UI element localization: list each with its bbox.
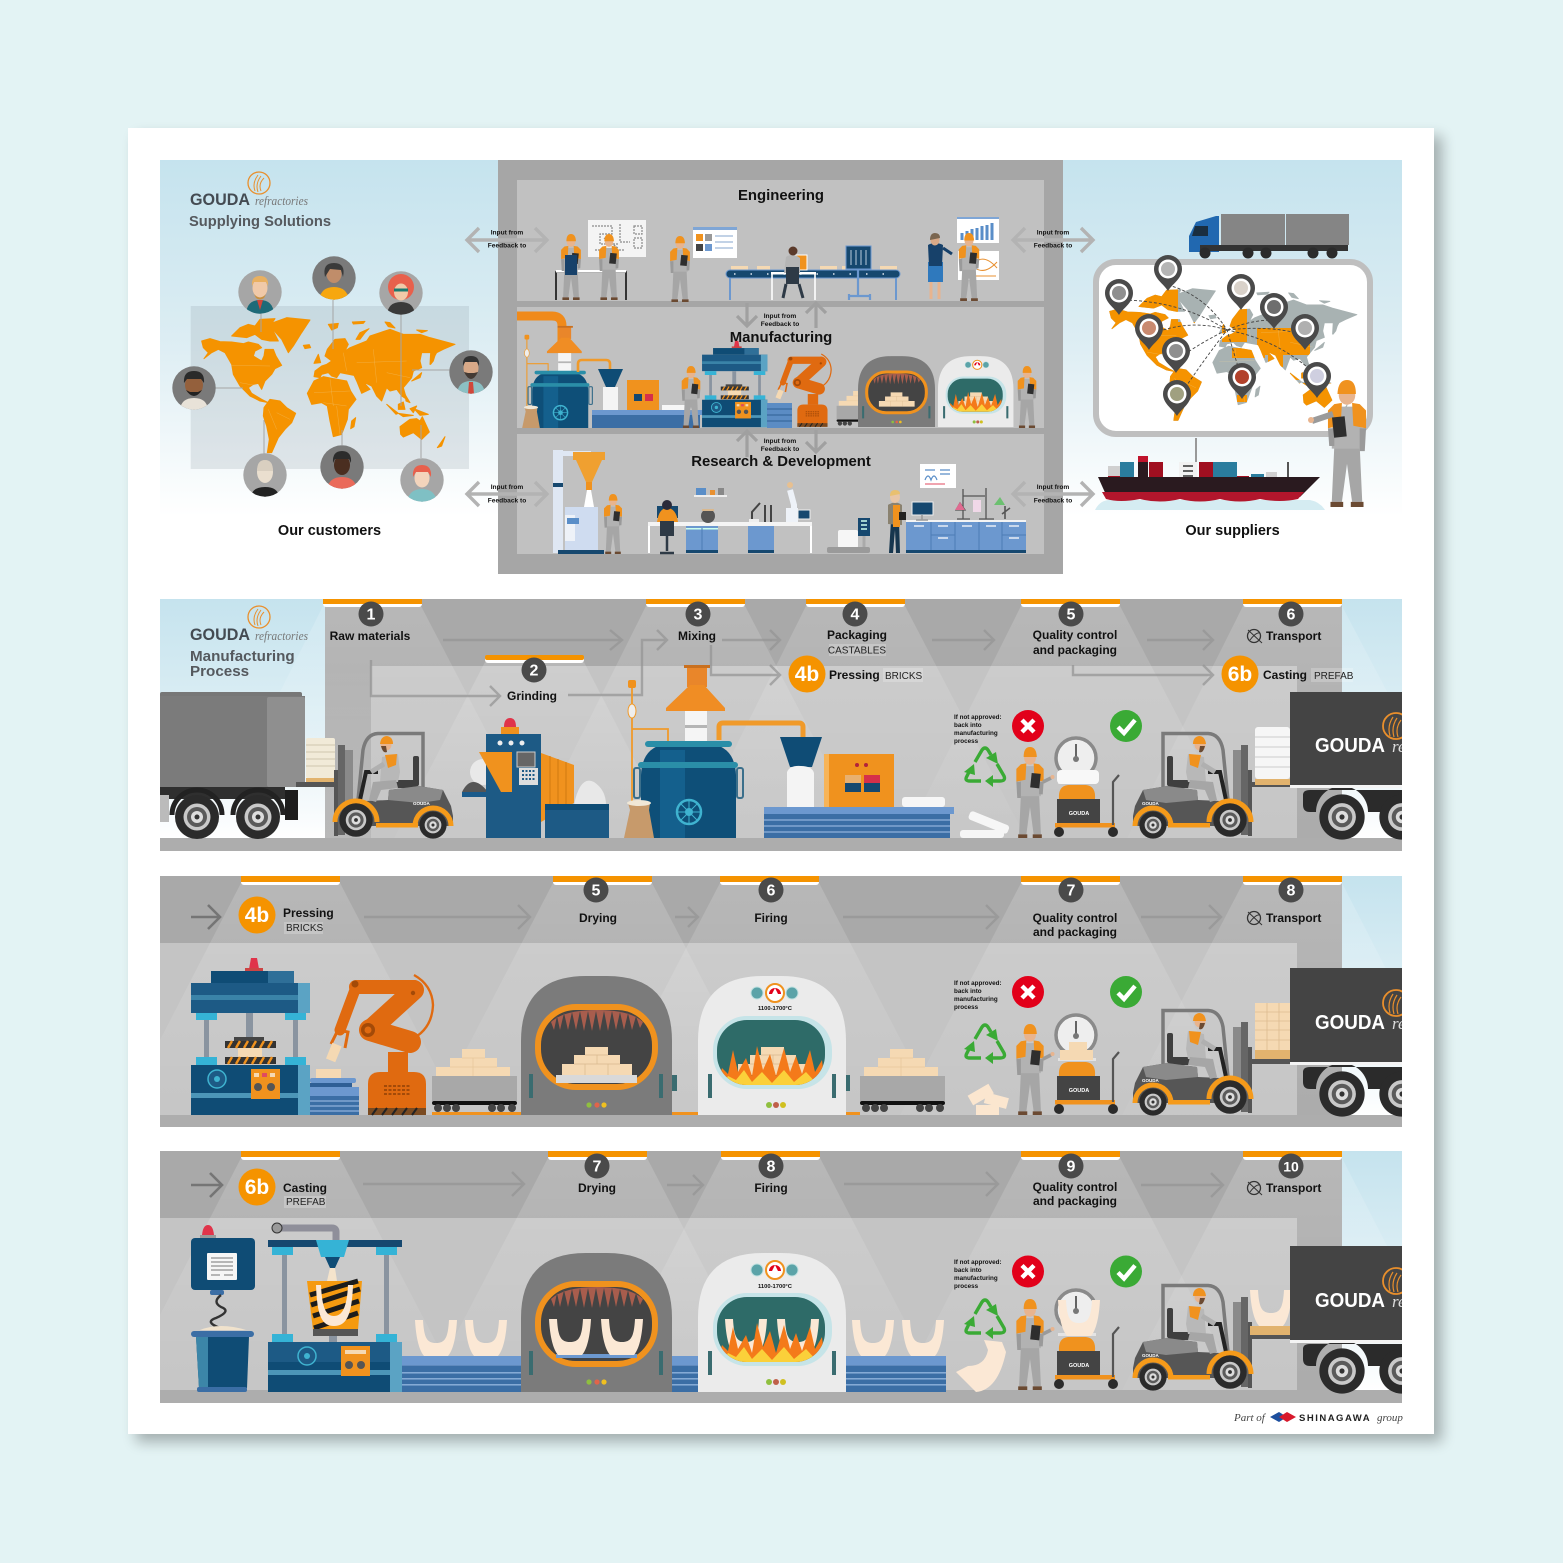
lamps (241, 1151, 1342, 1160)
conveyor with prefab shapes (402, 1320, 521, 1392)
rejected bricks (968, 1084, 1009, 1115)
reactor pipe (578, 360, 610, 372)
lab bench (906, 502, 1026, 553)
forklift label: GOUDA (1142, 1353, 1160, 1358)
logo: Gouda refractories: refractories (255, 193, 308, 208)
arrows: suppliers link, top: Feedback to (1034, 242, 1072, 250)
worker (1018, 366, 1036, 428)
scientist (888, 490, 906, 553)
flow arrows (371, 630, 1213, 706)
step 7: quality control: and packaging (1033, 925, 1117, 939)
step 7: drying (578, 1154, 616, 1195)
step 6b: casting prefab (238, 1168, 327, 1208)
truck delivering raw materials (160, 692, 305, 839)
dryer (521, 1253, 672, 1392)
QC station (964, 1290, 1119, 1390)
connector between kilns (672, 1075, 677, 1091)
table with two engineers (556, 234, 626, 300)
step 5: quality control: 5 (1067, 607, 1076, 624)
step 8: firing: Firing (754, 1181, 788, 1195)
orange floor lines (432, 1112, 860, 1115)
forklift label: GOUDA (1142, 1078, 1160, 1083)
press (702, 341, 768, 427)
robot (776, 354, 831, 427)
lamps (323, 599, 1342, 663)
prefab on pallet (1250, 1290, 1292, 1335)
engineer pointing at map (1308, 380, 1366, 507)
step 7: quality control: Quality control (1033, 911, 1117, 925)
step 6b: casting prefab: PREFAB (1314, 671, 1354, 682)
footer: part of Shinagawa group: Part of (1233, 1412, 1267, 1424)
avatar 6 (243, 453, 287, 497)
step 4: packaging castables: CASTABLES (828, 646, 886, 656)
step 8: firing: 8 (767, 1159, 776, 1176)
logo: Gouda refractories (190, 606, 308, 644)
brick stack (767, 403, 792, 428)
connector after furnace (846, 1075, 850, 1091)
logo: Gouda refractories (190, 172, 308, 209)
truck leaving: ref (1392, 1014, 1413, 1033)
arrows: suppliers link, top (1013, 228, 1093, 252)
truck leaving (1290, 1246, 1425, 1394)
step 3: mixing: 3 (694, 607, 703, 624)
step 8: firing (754, 1154, 788, 1195)
logo: Gouda refractories: refractories (255, 628, 308, 643)
step 8: transport (1248, 878, 1321, 925)
sacks on pallet (306, 738, 335, 784)
map panel: customers (191, 306, 469, 469)
step 10: transport (1248, 1154, 1321, 1195)
engineer with chart panels (957, 217, 999, 301)
panel: process row 2 (160, 876, 1425, 1127)
avatar 5 (172, 366, 216, 410)
bag on scale (1057, 770, 1099, 817)
step 6: firing (754, 878, 788, 925)
forklift label: GOUDA (413, 801, 430, 806)
step 6b: casting prefab: Casting (283, 1181, 327, 1195)
panel: suppliers map (1096, 255, 1370, 434)
arrows: customers link, bottom (467, 482, 547, 506)
arrows: suppliers link, bottom: Feedback to (1034, 498, 1072, 504)
arrows: customers link, top (467, 228, 547, 252)
furnace (698, 976, 846, 1115)
forklift (1133, 1286, 1290, 1391)
wagon with bricks (432, 1049, 517, 1112)
heading: our customers: Our customers (278, 523, 381, 539)
footer: part of Shinagawa group: group (1377, 1412, 1403, 1424)
QC note: manufacturing (954, 730, 998, 737)
panel: process row 3 (160, 1151, 1425, 1403)
step 1: raw materials: 1 (367, 607, 376, 624)
step 6: transport: Transport (1266, 629, 1321, 643)
packing machine and conveyor (764, 737, 954, 838)
shipping routes (1119, 285, 1317, 400)
background structure (160, 599, 1402, 851)
QC station (964, 1015, 1119, 1115)
footer: part of Shinagawa group (1233, 1412, 1403, 1424)
QC note: back into (954, 722, 982, 729)
step 4b: pressing bricks: 4b (245, 904, 269, 927)
step 4: packaging castables: 4 (851, 607, 860, 624)
vertical arrows and labels: manufacturing to R&D: Feedback to (761, 446, 799, 453)
step 4b: pressing bricks: Pressing (283, 906, 334, 920)
truck leaving: ref (1392, 737, 1413, 756)
panel: supplying solutions overview (160, 160, 1402, 574)
footer: part of Shinagawa group: SHINAGAWA (1299, 1413, 1371, 1424)
furnace: 1100-1700°C (758, 1006, 793, 1012)
step 3: mixing: Mixing (678, 629, 716, 643)
step 6b: casting prefab (1222, 656, 1354, 692)
worker (604, 494, 622, 554)
arrows: customers link, top: Feedback to (488, 242, 526, 250)
step 8: transport: 8 (1287, 883, 1296, 900)
step 4: packaging castables (827, 602, 887, 656)
step 7: quality control: 7 (1067, 883, 1076, 900)
conveyor between kilns (672, 1356, 698, 1392)
logo: Gouda refractories: GOUDA (190, 626, 250, 644)
QC note: If not approved: (954, 1259, 1002, 1266)
press (191, 958, 310, 1115)
vertical arrows and labels: manufacturing to R&D (737, 430, 826, 457)
step 5: drying (579, 878, 617, 925)
logo: Gouda refractories: GOUDA (190, 191, 250, 209)
step 5: quality control: and packaging (1033, 643, 1117, 657)
reactor with hood (624, 665, 743, 838)
avatar 2 (312, 256, 356, 300)
step 9: quality control: and packaging (1033, 1194, 1117, 1208)
grinder (462, 718, 609, 838)
step 8: transport: Transport (1266, 911, 1321, 925)
truck leaving: ref (1392, 1292, 1413, 1311)
step 5: drying: Drying (579, 911, 617, 925)
step 6: firing: 6 (767, 883, 776, 900)
engineering drawing board (588, 220, 646, 257)
QC note (954, 714, 1002, 745)
lamps (241, 876, 1342, 885)
arrows: suppliers link, top: Input from (1037, 230, 1069, 236)
lab shelf and scale and microscope (694, 488, 771, 523)
step 5: quality control (1033, 602, 1117, 657)
avatar 7 (320, 445, 364, 489)
heading: engineering: Engineering (738, 188, 824, 204)
step 10: transport: Transport (1266, 1181, 1321, 1195)
step 6b: casting prefab: Casting (1263, 668, 1307, 682)
step 5: drying: 5 (592, 883, 601, 900)
engineering floor (556, 217, 999, 302)
heading: manufacturing: Manufacturing (730, 330, 832, 346)
bricks on scale (1060, 1042, 1093, 1094)
forklift (1133, 734, 1290, 839)
white lab robot (786, 482, 810, 522)
conveyor with prefab shapes (846, 1320, 946, 1392)
subtitle: Supplying Solutions (189, 213, 331, 230)
avatar 3 (379, 271, 423, 315)
QC note: manufacturing (954, 996, 998, 1003)
step 4b: pressing bricks (238, 896, 334, 934)
QC note (954, 1259, 1002, 1290)
QC pass and fail signs (1012, 710, 1142, 742)
floor scale (827, 518, 870, 553)
truck leaving: GOUDA (1315, 735, 1385, 757)
vertical arrows and labels: engineering to manufacturing: Feedback to (761, 321, 799, 328)
background structure (160, 876, 1402, 1127)
dryer (521, 976, 672, 1115)
forklift label: GOUDA (1142, 801, 1160, 806)
wall chart (920, 464, 956, 488)
step 6b: casting prefab: 6b (245, 1176, 269, 1199)
step 4b: pressing bricks (788, 656, 923, 692)
step 6: firing: Firing (754, 911, 788, 925)
QC note: process (954, 1004, 979, 1011)
step 7: drying: Drying (578, 1181, 616, 1195)
step 2: grinding (507, 658, 557, 703)
step 3: mixing (678, 602, 716, 643)
exhaust pipe (517, 316, 562, 342)
furnace (698, 1253, 846, 1392)
bricks on pallet (1255, 1003, 1290, 1059)
QC note: manufacturing (954, 1275, 998, 1282)
robot arm (326, 975, 433, 1115)
QC note: If not approved: (954, 980, 1002, 987)
engineer with chart panel (670, 227, 737, 302)
customer avatars (172, 256, 493, 502)
packing station (592, 369, 702, 428)
truck on map (1189, 214, 1349, 258)
truck leaving: GOUDA (1315, 1012, 1385, 1034)
arrows: customers link, top: Input from (491, 230, 523, 236)
truck leaving (1290, 968, 1425, 1117)
arrows: suppliers link, bottom (1013, 482, 1093, 506)
flow arrows (191, 1172, 1223, 1197)
control panel with hose (191, 1225, 255, 1328)
truck leaving (1290, 692, 1425, 840)
reactor pipe (719, 723, 803, 740)
step 10: transport: 10 (1283, 1159, 1299, 1175)
avatar 8 (400, 458, 444, 502)
casting machine (268, 1223, 402, 1392)
step 5: quality control: Quality control (1033, 628, 1117, 642)
wagon (837, 391, 883, 426)
QC note: back into (954, 988, 982, 995)
heading: research and development: Research & Development (691, 454, 871, 470)
chemistry glassware (955, 488, 1010, 519)
QC note: back into (954, 1267, 982, 1274)
QC note: If not approved: (954, 714, 1002, 721)
step 6b: casting prefab: 6b (1228, 663, 1252, 686)
title: manufacturing process: Process (190, 663, 249, 680)
QC pass and fail signs (1012, 976, 1142, 1008)
stack with brick (310, 1069, 359, 1115)
arrows: customers link, bottom: Input from (491, 484, 523, 491)
building: engineering, manufacturing, R&D (498, 160, 1063, 574)
connector lines (215, 300, 450, 458)
forklift (1133, 1010, 1290, 1116)
step 6: transport (1248, 602, 1321, 643)
truck leaving: GOUDA (1315, 1290, 1385, 1312)
bricks on scale: GOUDA (1069, 1088, 1089, 1094)
bag on scale: GOUDA (1069, 811, 1089, 817)
white card (128, 128, 1434, 1434)
furnace: 1100-1700°C (758, 1284, 793, 1290)
rejected prefab shape (956, 1340, 1006, 1392)
step 4b: pressing bricks: BRICKS (286, 923, 324, 934)
ship (1095, 438, 1325, 510)
rejected bags (960, 810, 1010, 838)
map pins (1105, 255, 1331, 416)
step 7: quality control (1033, 878, 1117, 939)
vertical arrows and labels: manufacturing to R&D: Input from (764, 438, 796, 445)
furnace (938, 356, 1013, 427)
desk with person at computer (648, 500, 812, 553)
QC note: process (954, 738, 979, 745)
wagon with bricks (860, 1049, 945, 1112)
step 7: drying: 7 (593, 1159, 602, 1176)
step 4: packaging castables: Packaging (827, 628, 887, 642)
finished sacks on pallet (1255, 727, 1290, 785)
dryer (858, 356, 935, 427)
QC note: process (954, 1283, 979, 1290)
arrows: customers link, bottom: Feedback to (488, 498, 526, 504)
step 9: quality control (1033, 1154, 1117, 1208)
step 2: grinding: 2 (530, 663, 539, 680)
woman in blue (928, 233, 952, 299)
material bin (191, 1326, 254, 1392)
step 2: grinding: Grinding (507, 689, 557, 703)
step 6: transport: 6 (1287, 607, 1296, 624)
control panel on stand (846, 246, 871, 300)
step 4b: pressing bricks: 4b (795, 663, 819, 686)
title: manufacturing process: Manufacturing (190, 648, 295, 665)
reactor (522, 326, 592, 428)
QC pass and fail signs (1012, 1256, 1142, 1288)
heading: our suppliers: Our suppliers (1185, 523, 1280, 539)
step 9: quality control: Quality control (1033, 1180, 1117, 1194)
step 1: raw materials: Raw materials (330, 629, 411, 643)
avatar 4 (449, 350, 493, 394)
prefab on scale (1058, 1300, 1100, 1369)
forklift (296, 734, 453, 839)
prefab on scale: GOUDA (1069, 1363, 1089, 1369)
QC note (954, 980, 1002, 1011)
step 6b: casting prefab: PREFAB (286, 1197, 326, 1208)
processing tower (553, 450, 605, 554)
QC station (964, 738, 1119, 838)
R&D floor (553, 450, 1026, 554)
step 4b: pressing bricks: BRICKS (885, 671, 923, 682)
background structure (160, 1151, 1402, 1403)
flow arrows (191, 905, 1221, 929)
card shadow (136, 136, 1442, 1442)
step 4b: pressing bricks: Pressing (829, 668, 880, 682)
conveyor and desk (726, 246, 900, 300)
title: manufacturing process (191, 650, 294, 676)
arrows: suppliers link, bottom: Input from (1037, 484, 1069, 491)
manufacturing floor (517, 316, 1036, 428)
vertical arrows and labels: engineering to manufacturing (737, 303, 826, 328)
worker (682, 366, 700, 428)
vertical arrows and labels: engineering to manufacturing: Input from (764, 313, 796, 320)
avatar 1 (238, 270, 282, 314)
step 1: raw materials (330, 602, 411, 643)
step 9: quality control: 9 (1067, 1159, 1076, 1176)
lab cabinets under desk (686, 526, 774, 553)
panel: process row 1 (160, 599, 1425, 851)
